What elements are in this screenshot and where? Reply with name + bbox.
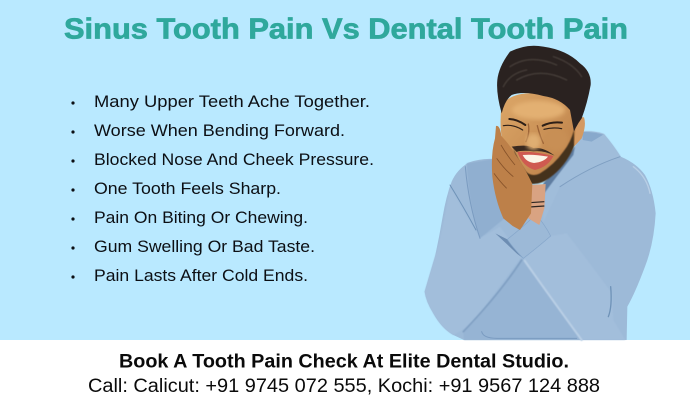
list item 5: Pain On Biting Or Chewing. bbox=[94, 208, 308, 227]
right forearm bbox=[523, 233, 625, 340]
list item 1: Many Upper Teeth Ache Together. bbox=[94, 92, 370, 111]
nose bbox=[526, 134, 541, 150]
title: Sinus Tooth Pain Vs Dental Tooth Pain bbox=[64, 14, 628, 46]
list item 4: One Tooth Feels Sharp. bbox=[94, 179, 281, 198]
sleeve cuff bbox=[507, 214, 551, 258]
moustache bbox=[512, 146, 555, 156]
beard bbox=[513, 130, 574, 184]
footer call to action: Book A Tooth Pain Check At Elite Dental Studio. bbox=[119, 352, 569, 372]
hand bbox=[492, 126, 532, 230]
symptom list bbox=[71, 92, 374, 285]
eyes and brows bbox=[503, 119, 562, 143]
list item 7: Pain Lasts After Cold Ends. bbox=[94, 266, 308, 285]
wristband bbox=[529, 202, 544, 207]
left sleeve bbox=[425, 187, 522, 335]
neck shadow bbox=[542, 147, 575, 197]
hood bbox=[543, 131, 621, 223]
wrist bbox=[528, 184, 546, 225]
torso front bbox=[463, 259, 582, 340]
hair highlights bbox=[503, 57, 582, 87]
forehead highlight bbox=[512, 101, 565, 119]
footer phone numbers: Call: Calicut: +91 9745 072 555, Kochi: +91 9567 124 888 bbox=[88, 376, 600, 397]
footer band bbox=[0, 340, 690, 407]
list item 6: Gum Swelling Or Bad Taste. bbox=[94, 237, 315, 256]
cheek shade bbox=[545, 129, 569, 151]
hood inner bbox=[583, 132, 603, 142]
chest left bbox=[467, 159, 507, 238]
list item 2: Worse When Bending Forward. bbox=[94, 121, 345, 140]
face bbox=[501, 93, 576, 183]
hoodie creases bbox=[450, 157, 650, 340]
finger lines bbox=[494, 145, 515, 188]
list item 3: Blocked Nose And Cheek Pressure. bbox=[94, 150, 374, 169]
hoodie base bbox=[425, 131, 656, 340]
mouth bbox=[517, 152, 553, 170]
left cuff shadow bbox=[495, 233, 523, 258]
ear bbox=[574, 117, 585, 147]
photo: man holding cheek in pain bbox=[425, 46, 656, 340]
hair bbox=[497, 46, 591, 132]
